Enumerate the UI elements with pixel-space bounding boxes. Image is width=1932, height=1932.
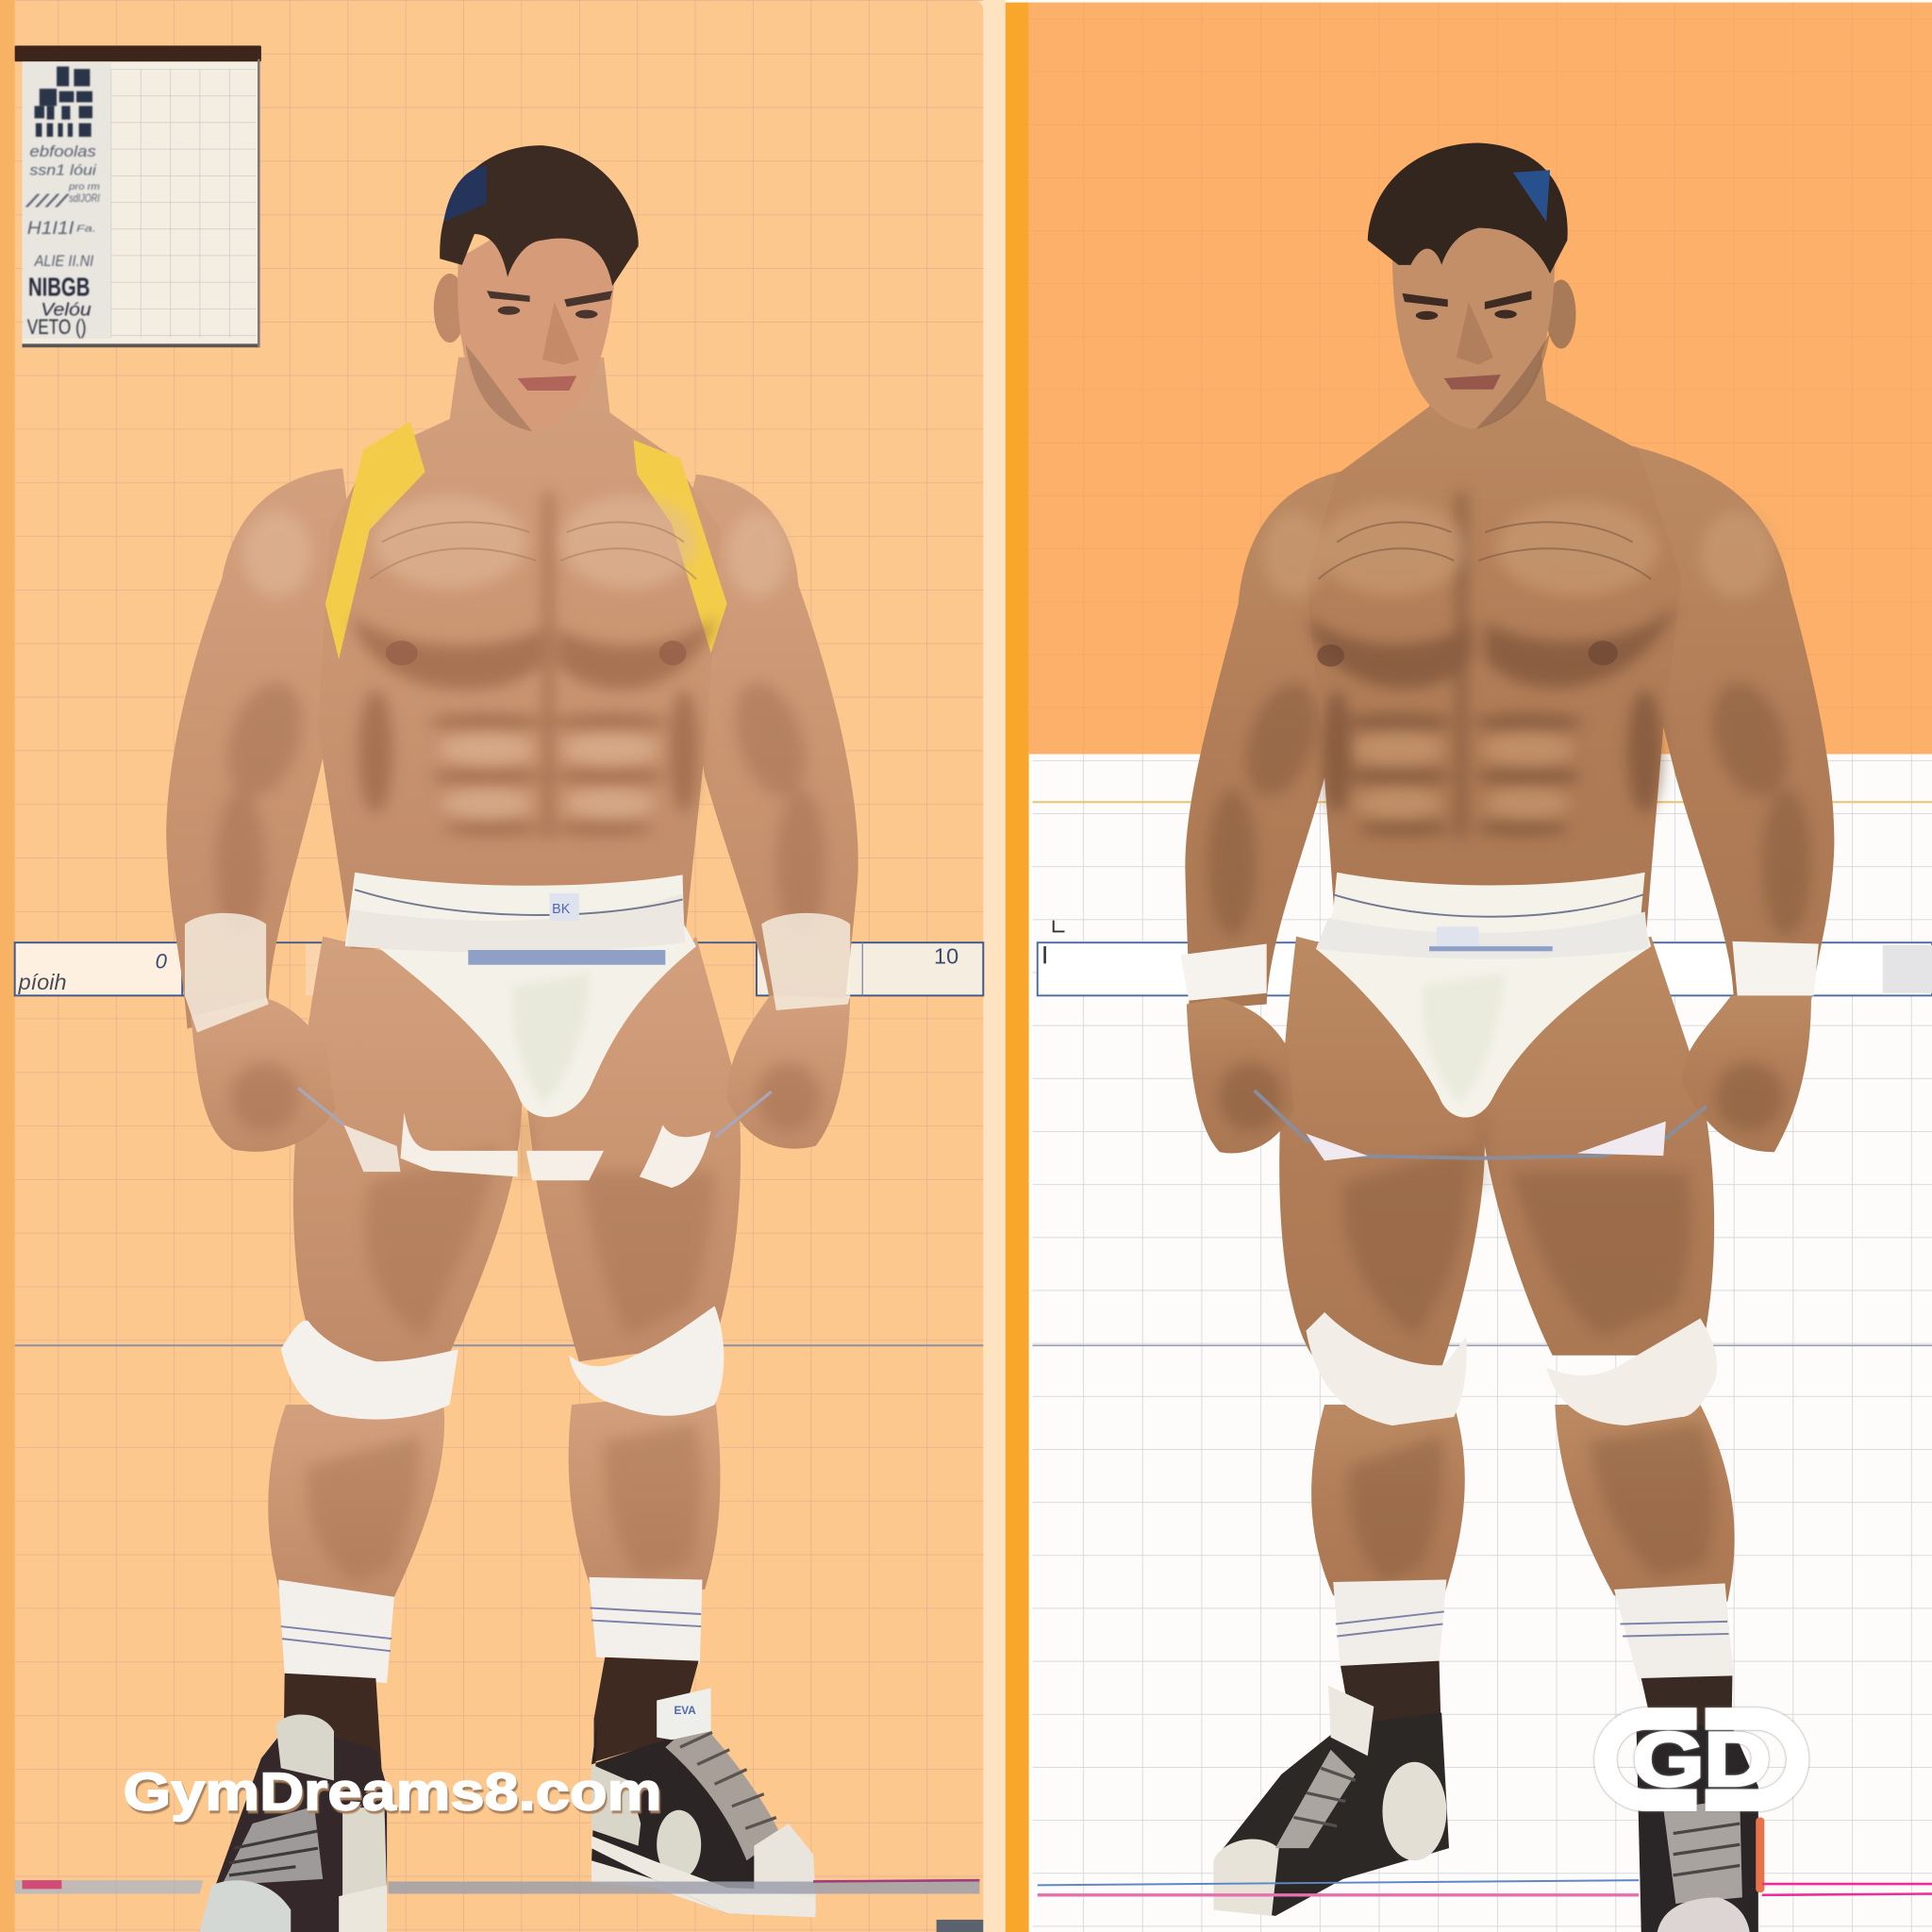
- inset scribbled text: pro rm: [68, 182, 100, 192]
- baseline rule: left: [15, 1880, 983, 1932]
- right-figure chest hair lines: [1319, 523, 1651, 579]
- right-figure waist cord: [1255, 1091, 1707, 1160]
- band digit: 0: [821, 956, 834, 981]
- left-figure wrist bands: [185, 913, 850, 1033]
- inset scribbled text: Fa.: [76, 225, 96, 235]
- left-figure arms: [166, 468, 858, 1152]
- right-figure shoe: viewer right: [1637, 1725, 1764, 1932]
- inset scribbled text: ALIE II.NI: [34, 252, 94, 270]
- brief label: BK: [552, 902, 571, 917]
- measuring band: left: [15, 942, 983, 995]
- right-figure arms: [1185, 446, 1834, 1153]
- left-figure chest hair lines: [370, 523, 696, 579]
- logo: GD: [1594, 1707, 1808, 1811]
- left-figure knee wraps: [281, 1306, 724, 1420]
- inset bold letters: VETO (): [27, 315, 86, 339]
- right-figure head: [1392, 204, 1576, 429]
- measuring band: right: [1038, 921, 1932, 995]
- panel: left peach grid: [0, 0, 983, 1932]
- inset bold letters: NIBGB: [28, 272, 90, 301]
- left-figure arm shading: [214, 673, 825, 1131]
- left-figure nipples: [386, 641, 687, 665]
- right-figure wrist bands: [1180, 941, 1819, 1001]
- right-figure hair: [1368, 143, 1568, 274]
- left-figure neck and torso: [318, 358, 721, 949]
- right-figure brief: [1316, 873, 1651, 1118]
- left-figure chest highlight: [242, 495, 789, 818]
- right-figure legs: [1279, 937, 1735, 1602]
- band digit: 0: [156, 950, 168, 974]
- inset data sheet: [15, 45, 261, 347]
- right-figure ankles: [1341, 1661, 1732, 1750]
- inset scribbled text: [24, 142, 100, 270]
- inset scribbled text: ebfoolas: [29, 142, 96, 160]
- left-figure shoe: viewer left: [200, 1715, 387, 1932]
- left-figure hair: [440, 145, 639, 286]
- inset scribbled text: sdIJORI: [69, 192, 100, 205]
- figure: left: [166, 145, 858, 1932]
- inset bold letters: Velóu: [41, 299, 92, 320]
- right-figure neck and torso: [1306, 345, 1682, 949]
- right-figure muscle shading: [1306, 492, 1678, 838]
- left-figure hand grip tape: [298, 1088, 772, 1188]
- left-figure muscle shading: [351, 492, 717, 838]
- left-figure head: [434, 209, 616, 431]
- left-figure ankles: [283, 1657, 699, 1774]
- watermark: site name: GymDreams8.com: [124, 1762, 661, 1822]
- inset scribbled text: ////: [24, 191, 71, 211]
- panel: right orange and white grid: [1006, 0, 1932, 1932]
- right-figure facial features: [1402, 291, 1532, 390]
- baseline rule: right: [1038, 1880, 1932, 1895]
- band digit: 10: [934, 943, 958, 968]
- inset bold letters: [27, 272, 92, 339]
- left-figure shoe: viewer right: [591, 1688, 816, 1917]
- right-figure leg shading: [1342, 1115, 1715, 1583]
- left-figure straps: [325, 422, 727, 659]
- shoe tag print: EVA: [674, 1705, 696, 1717]
- left-figure leg shading: [307, 1115, 715, 1583]
- band digit: 0: [189, 949, 202, 974]
- right-figure nipples: [1317, 641, 1618, 667]
- left-figure legs: [268, 937, 741, 1602]
- right-figure shoe: viewer left: [1214, 1686, 1449, 1916]
- left-figure brief: [345, 873, 696, 1117]
- inset scribbled text: ssn1 lóui: [29, 162, 96, 178]
- right-figure knee wraps: [1306, 1312, 1717, 1425]
- band label: píoih: [18, 970, 67, 994]
- left-figure socks: [278, 1577, 702, 1683]
- logo: GD: GD: [1633, 1718, 1771, 1803]
- inset scribbled text: H1I1I: [27, 218, 75, 239]
- left-figure facial features: [487, 291, 612, 391]
- figure: right: [1180, 143, 1834, 1932]
- inset glyph blocks: [35, 67, 92, 137]
- right-figure chest highlight: [1263, 502, 1774, 818]
- right-figure socks: [1333, 1579, 1734, 1682]
- right-figure arm shading: [1208, 673, 1811, 1131]
